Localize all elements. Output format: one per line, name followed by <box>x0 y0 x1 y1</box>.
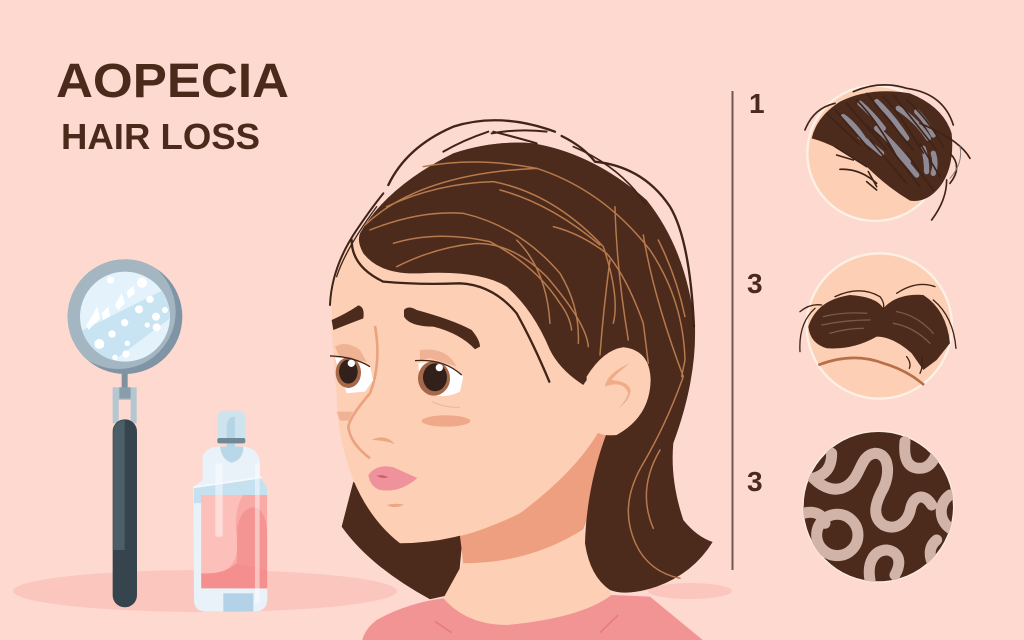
ear detail <box>605 363 631 412</box>
left eyebrow <box>332 305 364 330</box>
woman portrait <box>330 120 713 640</box>
hairline and flyaway strands <box>330 120 694 382</box>
vertical divider <box>732 91 734 570</box>
hair highlights <box>365 162 685 578</box>
collar marks <box>435 615 618 633</box>
step number 1: 1 <box>749 88 765 119</box>
title: AOPECIA <box>56 55 289 108</box>
neck and shadow <box>443 433 612 625</box>
step number 3 bottom: 3 <box>747 466 763 497</box>
hair: back main <box>360 143 713 593</box>
chin mark <box>387 504 404 507</box>
icon: bottle with pink liquid <box>193 411 268 613</box>
eye shadow and cheek marks <box>335 344 457 421</box>
cheek blush <box>422 415 470 427</box>
circle 2: patchy hair <box>800 253 956 399</box>
floor shadow left <box>13 570 397 612</box>
right eyebrow <box>404 307 480 349</box>
step number 3 top: 3 <box>747 268 763 299</box>
floor shadow right <box>648 583 732 599</box>
icon: magnifying glass <box>61 254 182 607</box>
circle 1: thinning crown <box>805 85 970 221</box>
shirt <box>362 595 707 640</box>
right eye <box>415 360 463 407</box>
nose line <box>348 326 377 458</box>
face <box>332 237 609 543</box>
hair: back lower left <box>342 482 463 599</box>
left eye <box>330 356 373 393</box>
hair: front fringe <box>359 143 653 385</box>
subtitle: HAIR LOSS <box>61 116 260 157</box>
nostril <box>372 437 395 444</box>
ear <box>587 347 651 435</box>
neck shadow <box>460 432 608 563</box>
lip line <box>377 475 388 478</box>
circle 3: curly hair pattern <box>802 431 954 583</box>
lips <box>368 466 417 491</box>
